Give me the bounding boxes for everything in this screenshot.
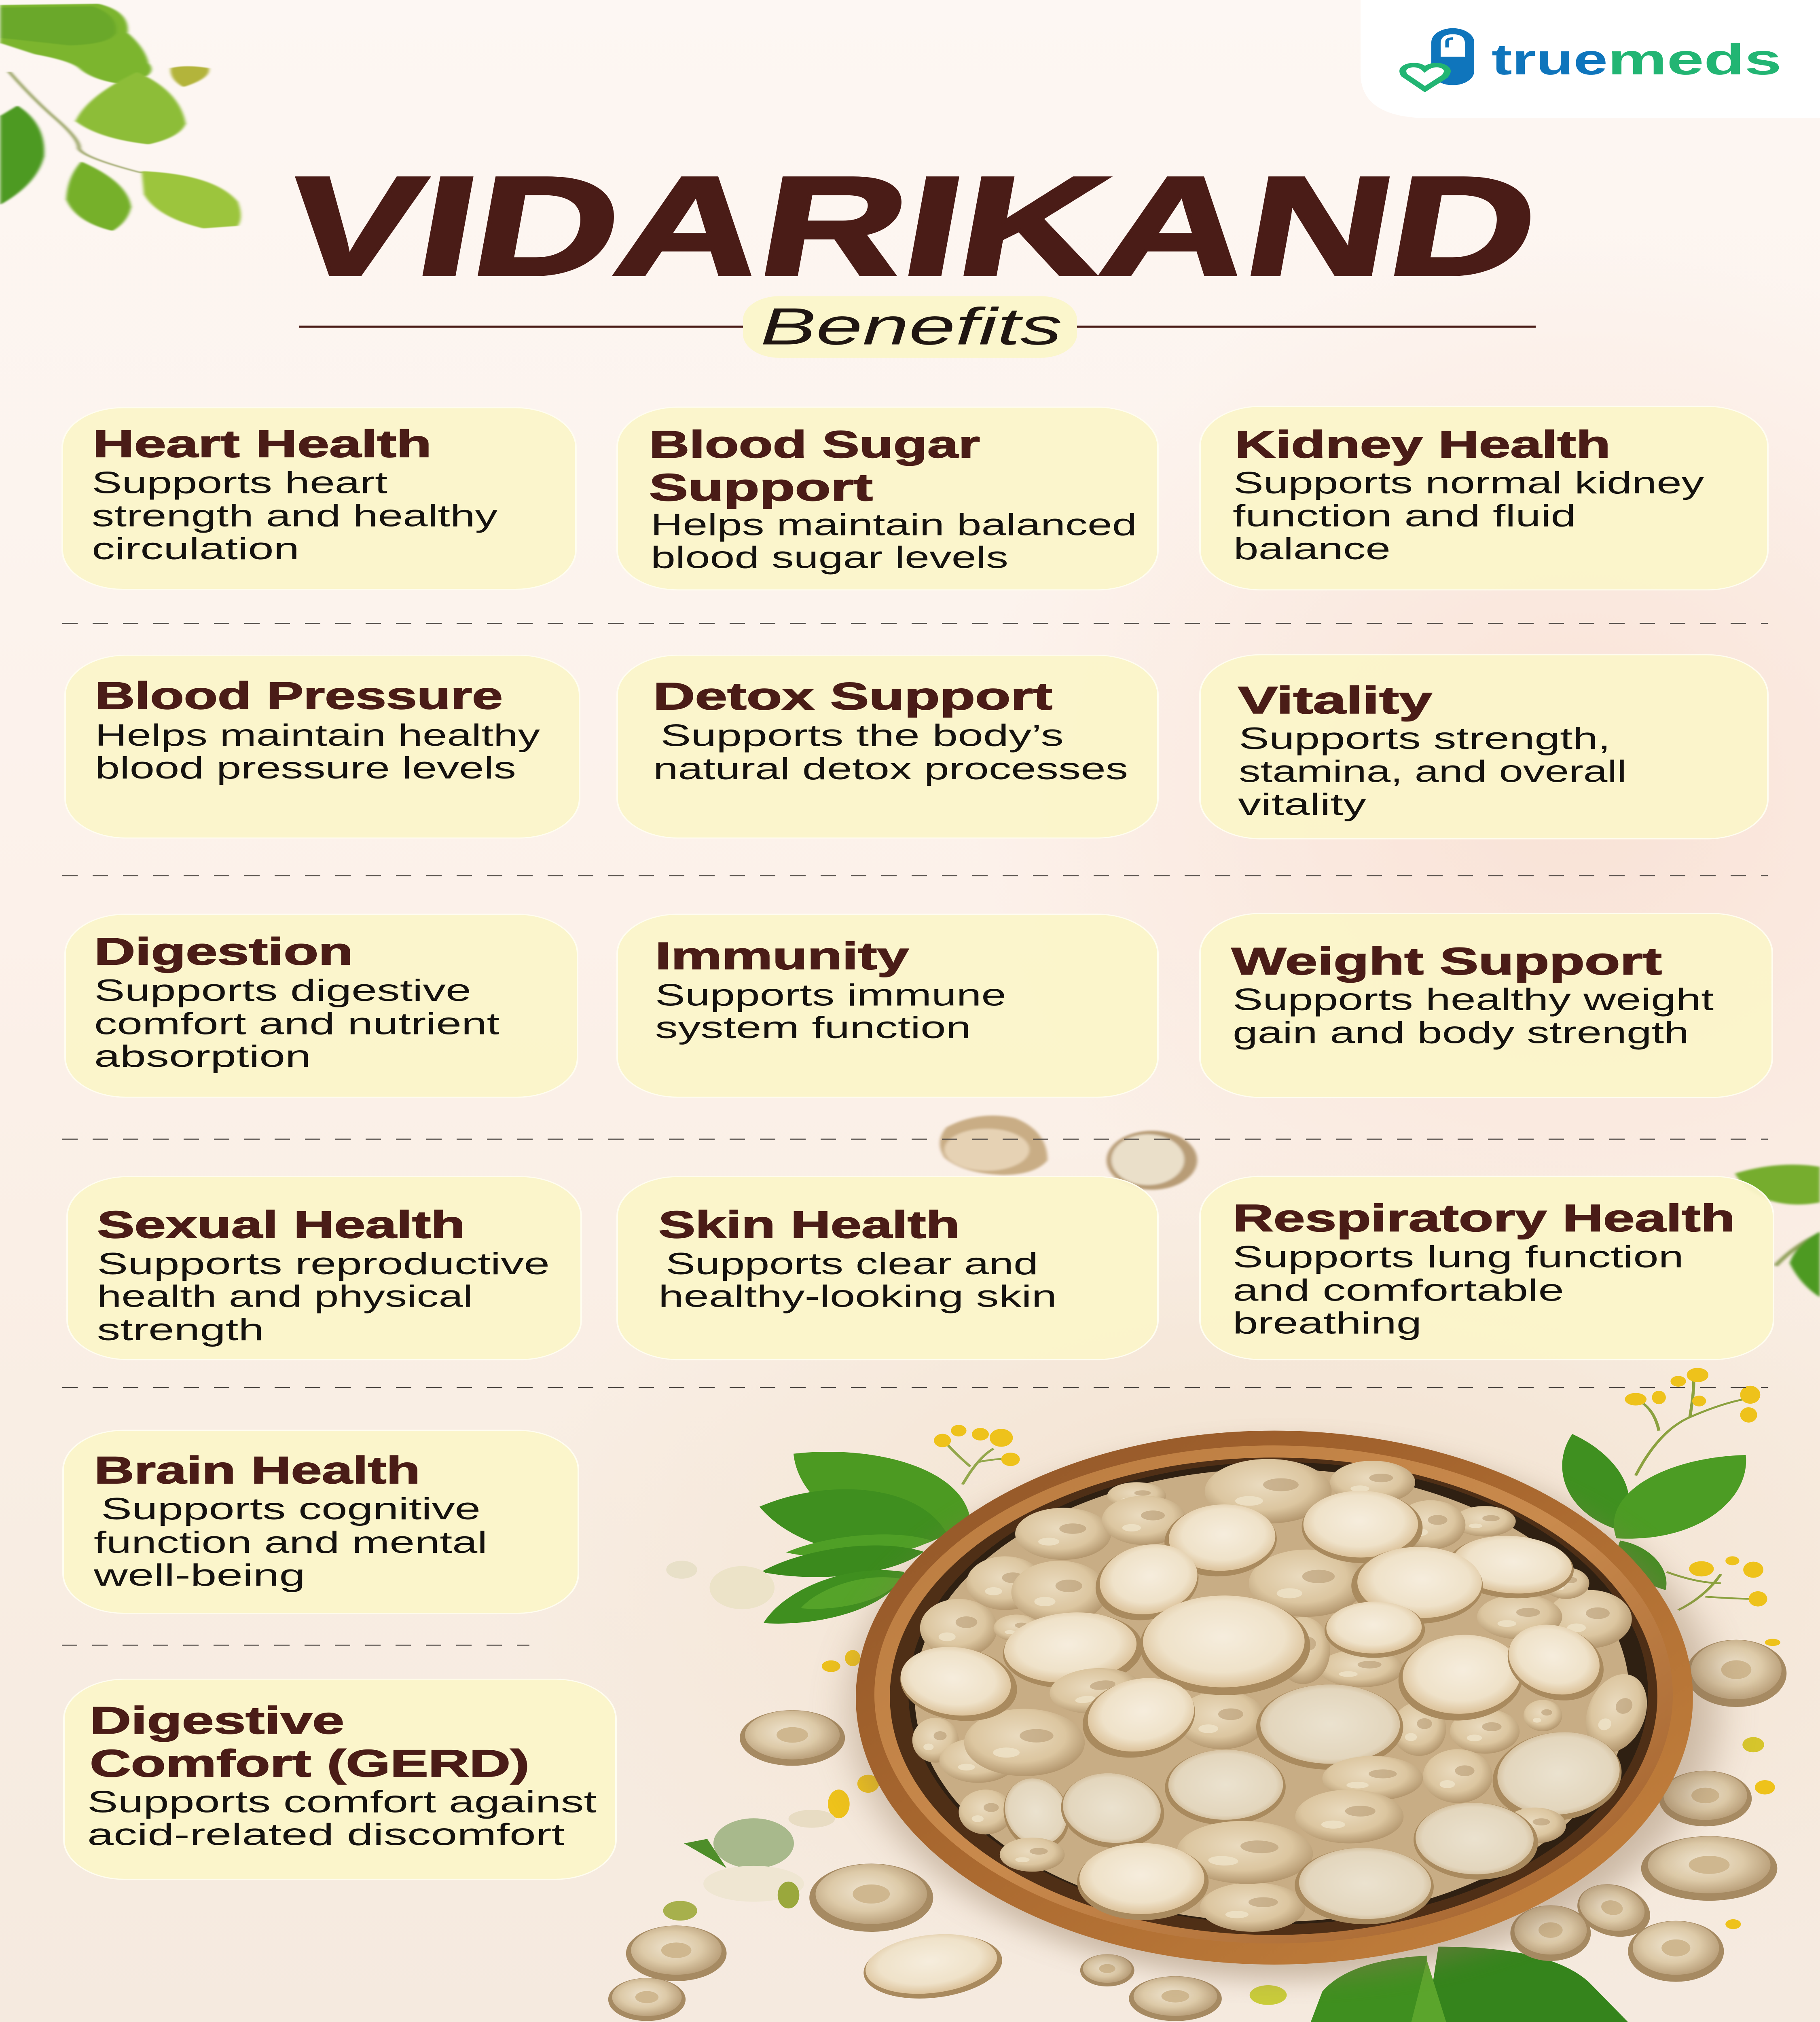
panel: detox support: Detox Support	[653, 675, 1052, 717]
panel: digestive comfort: Comfort (GERD)	[90, 1742, 529, 1785]
garnish: dried leaves	[663, 1561, 835, 1920]
loose root slices	[608, 1640, 1786, 2021]
top-left leaves	[0, 4, 241, 231]
panel: blood sugar support: Support	[649, 466, 873, 509]
panel: sexual health	[67, 1176, 581, 1360]
panel: blood sugar support: blood sugar levels	[651, 540, 1008, 575]
panel: blood sugar support: Helps maintain balanced	[651, 508, 1137, 542]
garnish: bottom leaves	[1311, 1947, 1628, 2022]
panel: blood pressure: blood pressure levels	[95, 751, 516, 785]
panel: heart health: strength and healthy	[92, 499, 497, 533]
panel: respiratory health: Respiratory Health	[1233, 1197, 1735, 1239]
panel: heart health: Heart Health	[93, 422, 432, 465]
panel: digestion: Supports digestive	[94, 973, 471, 1007]
panel: digestive comfort	[64, 1679, 616, 1879]
panel: brain health: well-being	[93, 1558, 305, 1592]
panel: vitality	[1200, 655, 1768, 839]
bowl	[851, 1431, 1717, 1980]
photo: bowl of vidarikand root slices and garnish	[608, 1368, 1786, 2022]
garnish: yellow flowers	[822, 1368, 1780, 2005]
panel: skin health: healthy-looking skin	[658, 1279, 1057, 1313]
panel: digestive comfort: Supports comfort against	[87, 1785, 597, 1819]
divider 2	[62, 875, 1768, 876]
panel: weight support	[1200, 914, 1772, 1098]
panel: heart health: circulation	[92, 531, 299, 566]
panel: kidney health: balance	[1234, 531, 1390, 566]
panel: weight support: Weight Support	[1232, 940, 1662, 982]
panel: blood sugar support	[617, 407, 1158, 590]
divider 4	[62, 1387, 1768, 1388]
panel: blood pressure: Blood Pressure	[95, 674, 503, 717]
panel: heart health: Supports heart	[92, 465, 387, 500]
panel: detox support	[617, 655, 1158, 838]
wordmark: true	[1492, 35, 1608, 84]
panel: respiratory health: breathing	[1233, 1306, 1422, 1340]
panel: digestive comfort: acid-related discomfort	[87, 1817, 565, 1852]
panel: vitality: Supports strength,	[1239, 721, 1610, 755]
icon: capsule	[1431, 28, 1474, 85]
panel: digestive comfort: Digestive	[90, 1699, 344, 1742]
panel: skin health: Skin Health	[658, 1203, 960, 1246]
subtitle: benefits	[299, 296, 1536, 358]
panel: digestion: comfort and nutrient	[94, 1007, 499, 1041]
panel: blood sugar support: Blood Sugar	[649, 423, 980, 465]
divider 3	[62, 1138, 1768, 1140]
panel: immunity: Immunity	[655, 935, 909, 977]
panel: sexual health: Supports reproductive	[97, 1246, 550, 1281]
panel: digestion: Digestion	[94, 930, 353, 973]
leaves right of respiratory card	[1735, 1165, 1820, 1297]
panel: blood pressure: Helps maintain healthy	[95, 718, 540, 752]
panel: kidney health: function and fluid	[1233, 499, 1576, 533]
panel: kidney health: Supports normal kidney	[1234, 465, 1704, 500]
panel: immunity	[617, 914, 1158, 1097]
panel: respiratory health: Supports lung function	[1233, 1239, 1684, 1274]
panel: digestion	[65, 914, 578, 1097]
panel: kidney health	[1200, 406, 1768, 590]
panel: blood pressure	[65, 655, 580, 838]
panel: weight support: gain and body strength	[1233, 1015, 1689, 1050]
root slices in bowl	[877, 1459, 1655, 1932]
panel: weight support: Supports healthy weight	[1233, 982, 1714, 1017]
title: VIDARIKAND	[274, 147, 1550, 305]
panel: immunity: system function	[655, 1010, 971, 1045]
panel: detox support: natural detox processes	[653, 751, 1128, 786]
subtitle: benefits: Benefits	[760, 298, 1062, 355]
panel: brain health: Brain Health	[94, 1449, 420, 1491]
garnish: right leaves	[1544, 1381, 1780, 1610]
panel: brain health: function and mental	[94, 1525, 487, 1559]
panel: respiratory health: and comfortable	[1233, 1273, 1564, 1307]
panel: skin health: Supports clear and	[666, 1246, 1038, 1281]
wordmark	[1492, 35, 1782, 84]
panel: vitality: Vitality	[1238, 679, 1432, 721]
panel: vitality: stamina, and overall	[1239, 754, 1627, 789]
panel: digestion: absorption	[94, 1039, 311, 1073]
panel: sexual health: strength	[97, 1312, 264, 1347]
garnish: left leaves	[747, 1427, 1009, 1638]
icon: heart	[1403, 65, 1447, 89]
divider 5	[62, 1644, 529, 1646]
panel: brain health	[63, 1430, 578, 1613]
panel: vitality: vitality	[1238, 787, 1366, 821]
panel: immunity: Supports immune	[655, 978, 1006, 1012]
panel: brain health: Supports cognitive	[101, 1491, 480, 1526]
panel: heart health	[62, 408, 576, 589]
panel: sexual health: health and physical	[97, 1279, 473, 1313]
panel: kidney health: Kidney Health	[1235, 423, 1610, 465]
panel: sexual health: Sexual Health	[97, 1203, 465, 1246]
panel: detox support: Supports the body’s	[660, 718, 1064, 753]
panel: respiratory health	[1200, 1176, 1773, 1360]
panel: skin health	[617, 1176, 1158, 1360]
divider 1	[62, 622, 1768, 624]
logo panel	[1361, 0, 1820, 118]
floating root slices near row 4	[940, 1116, 1197, 1190]
wordmark: meds	[1608, 35, 1782, 84]
